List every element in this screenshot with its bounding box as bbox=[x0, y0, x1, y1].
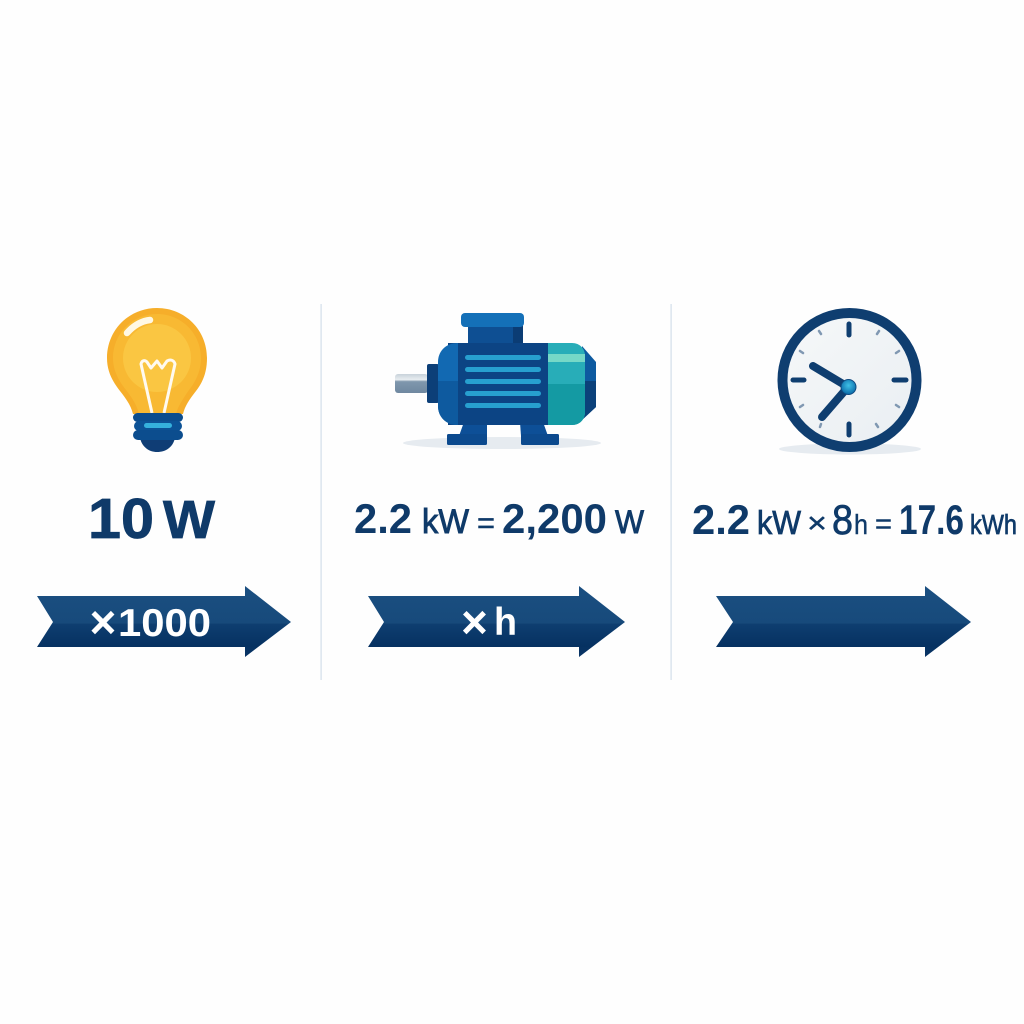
formula: 2.2 kW = 2,200 W: 2.2 bbox=[354, 495, 412, 542]
arrow: x1000 bbox=[37, 586, 291, 657]
arrow: right bbox=[716, 586, 971, 657]
icon: clock bbox=[779, 313, 921, 454]
formula: 2.2 kW x 8h = 17.6 kWh: 8 bbox=[832, 496, 853, 543]
formula: 2.2 kW x 8h = 17.6 kWh: h bbox=[854, 509, 868, 540]
formula: 2.2 kW x 8h = 17.6 kWh: × bbox=[807, 507, 827, 540]
formula: 2.2 kW x 8h = 17.6 kWh: 17.6 bbox=[899, 496, 964, 543]
arrow: x h bbox=[368, 586, 625, 657]
clock major ticks bbox=[793, 324, 906, 435]
divider: left bbox=[320, 304, 322, 680]
arrow: x h: × bbox=[461, 596, 488, 648]
icon: light bulb bbox=[107, 308, 207, 452]
motor cooling fins bbox=[465, 355, 541, 408]
formula: 2.2 kW = 2,200 W bbox=[354, 495, 645, 542]
formula: 2.2 kW = 2,200 W: 2,200 bbox=[502, 495, 607, 542]
formula: 2.2 kW x 8h = 17.6 kWh: 2.2 bbox=[692, 496, 750, 543]
clock minor ticks bbox=[800, 331, 899, 427]
formula: 2.2 kW = 2,200 W: kW bbox=[422, 503, 469, 541]
formula: 2.2 kW x 8h = 17.6 kWh: kW bbox=[757, 504, 802, 541]
arrow: x1000: 1000 bbox=[118, 602, 211, 645]
formula: 2.2 kW x 8h = 17.6 kWh bbox=[692, 496, 1017, 543]
clock hands bbox=[813, 366, 848, 417]
formula: 2.2 kW = 2,200 W: = bbox=[477, 507, 495, 540]
heading: 10 W: 10 bbox=[88, 487, 154, 551]
formula: 2.2 kW x 8h = 17.6 kWh: = bbox=[875, 508, 892, 539]
divider: right bbox=[670, 304, 672, 680]
heading: 10 W bbox=[88, 487, 215, 551]
formula: 2.2 kW = 2,200 W: W bbox=[615, 504, 645, 540]
icon: electric motor bbox=[395, 313, 601, 449]
heading: 10 W: W bbox=[163, 490, 215, 550]
arrow: x1000: × bbox=[90, 596, 116, 648]
arrow: x h: h bbox=[494, 601, 517, 644]
